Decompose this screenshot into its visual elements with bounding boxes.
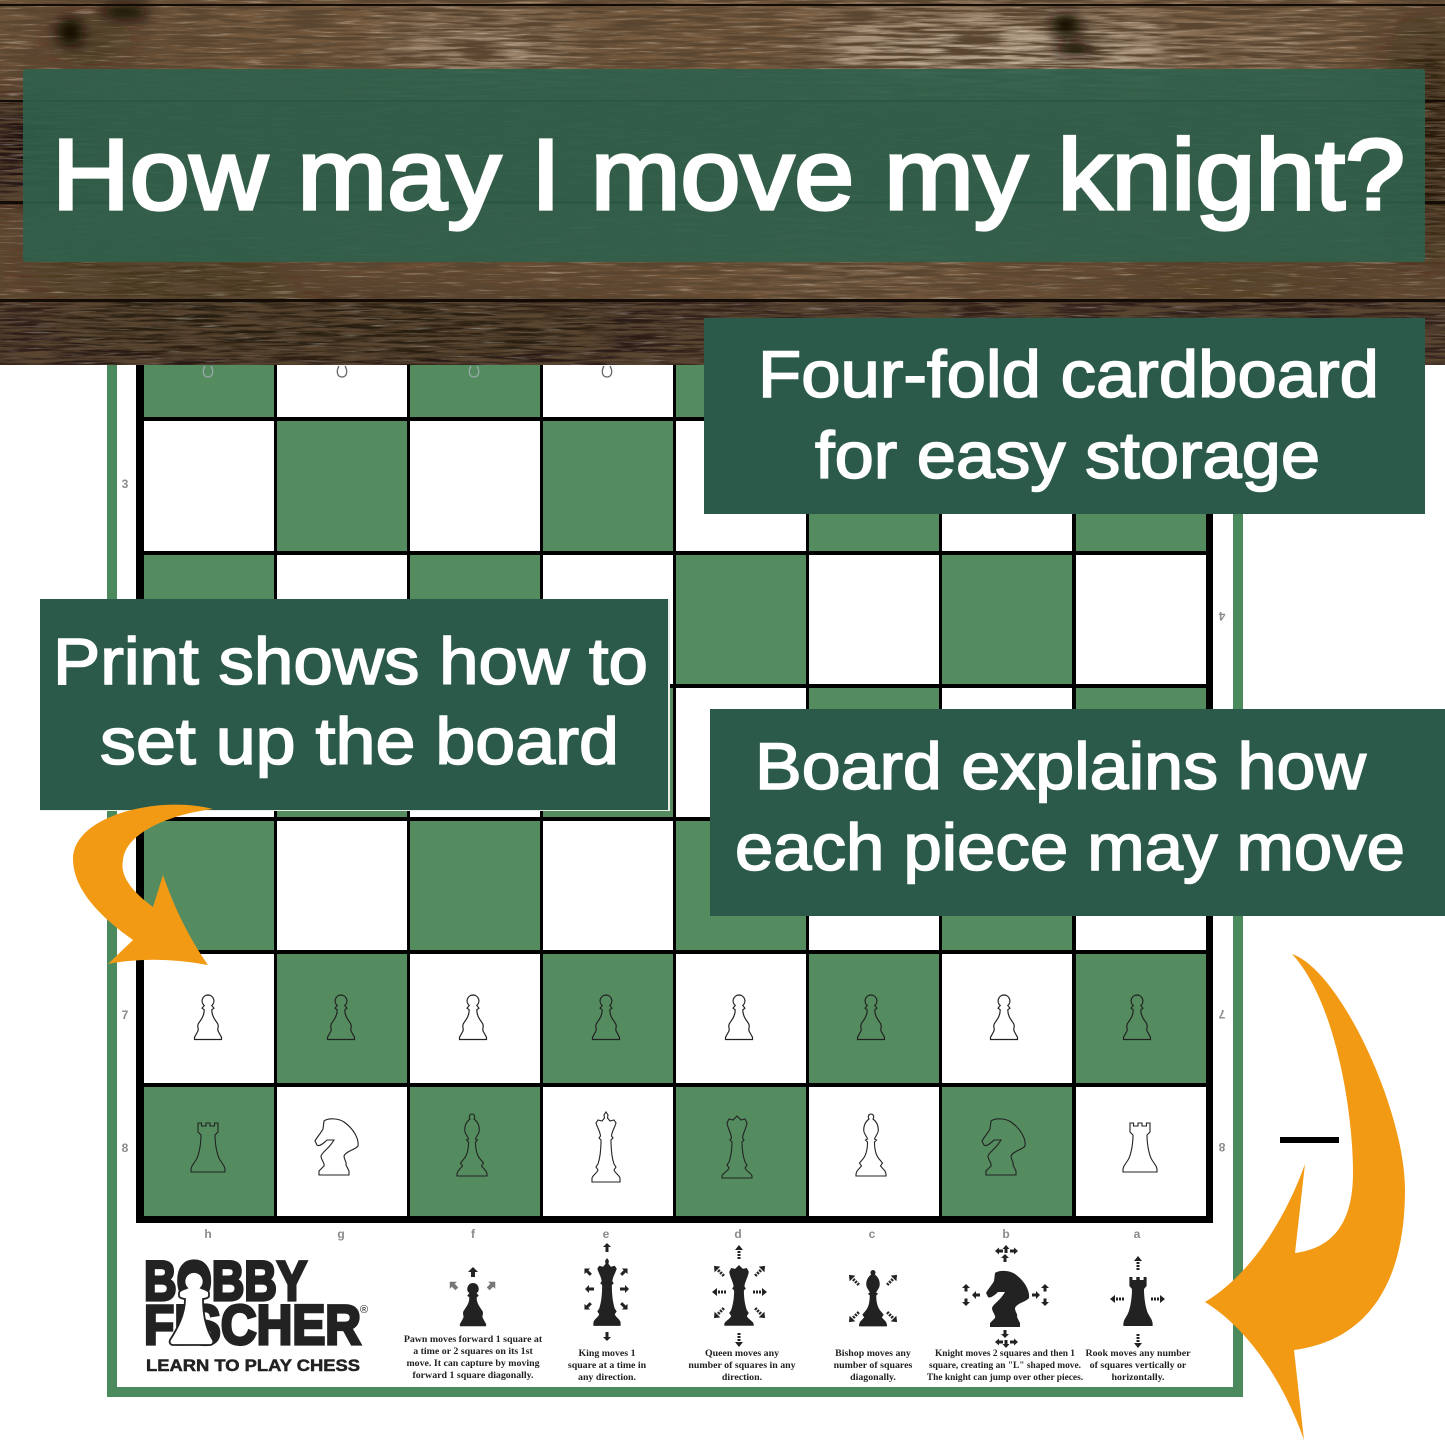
rank labels: 7	[1218, 1007, 1225, 1021]
arrow: to pawn row	[73, 805, 213, 965]
callout: print	[40, 599, 670, 811]
legend: bishop: Bishop moves any	[835, 1348, 911, 1359]
callout: cardboard: for easy storage	[815, 418, 1320, 492]
legend: rook: horizontally.	[1112, 1372, 1165, 1383]
file labels	[204, 1227, 1141, 1241]
wood plank header	[0, 0, 1445, 365]
Bobby Fischer logo	[144, 1249, 368, 1375]
legend: pawn: a time or 2 squares on its 1st	[413, 1346, 533, 1357]
callout: cardboard: Four-fold cardboard	[758, 337, 1379, 411]
callout: board explains: each piece may move	[735, 810, 1405, 884]
title: How may I move my knight?	[52, 119, 1405, 231]
black dash mark	[1280, 1137, 1339, 1143]
file labels: f	[471, 1227, 476, 1241]
callout: print: set up the board	[100, 704, 619, 778]
logo pawn	[170, 1272, 213, 1345]
legend: king: any direction.	[578, 1372, 637, 1383]
Bobby Fischer logo: BOBBY	[144, 1249, 307, 1312]
callout: board explains	[710, 709, 1445, 916]
file labels: g	[337, 1227, 345, 1241]
Bobby Fischer logo: LEARN TO PLAY CHESS	[146, 1357, 360, 1375]
legend: rook	[1085, 1256, 1191, 1383]
legend: bishop: diagonally.	[850, 1372, 896, 1383]
legend: queen	[688, 1245, 796, 1383]
title banner	[23, 69, 1425, 262]
legend: king: King moves 1	[578, 1348, 636, 1359]
file labels: c	[869, 1227, 876, 1241]
legend: pawn: Pawn moves forward 1 square at	[404, 1334, 543, 1345]
wood dark patches	[0, 10, 1445, 360]
legend: bishop: number of squares	[834, 1360, 912, 1371]
pawn heads cut off at top of board	[203, 366, 612, 377]
arrow: to legend	[1205, 954, 1405, 1440]
legend: king: square at a time in	[568, 1360, 647, 1371]
rank labels: 3	[122, 477, 129, 491]
callout: cardboard	[704, 318, 1425, 514]
legend: queen: Queen moves any	[705, 1348, 779, 1359]
Bobby Fischer logo: FISCHER	[144, 1293, 361, 1356]
legend: king	[568, 1243, 647, 1383]
wood knots	[56, 5, 1092, 56]
legend: pawn: move. It can capture by moving	[406, 1358, 540, 1369]
board squares	[144, 340, 1206, 1216]
outlined back row pieces	[191, 1112, 1157, 1182]
file labels: a	[1134, 1227, 1141, 1241]
legend: knight: The knight can jump over other pieces.	[927, 1373, 1083, 1383]
legend: knight	[927, 1245, 1083, 1383]
rank labels: 8	[122, 1141, 129, 1155]
legend: queen: direction.	[722, 1372, 763, 1383]
wood light patches	[380, 12, 1330, 287]
legend: bishop	[834, 1270, 912, 1383]
file labels: h	[204, 1227, 212, 1241]
outlined pawn row	[194, 995, 1150, 1039]
rank labels: 4	[1218, 609, 1225, 623]
file labels: e	[603, 1227, 610, 1241]
Bobby Fischer logo: ®	[360, 1304, 368, 1316]
callout: board explains: Board explains how	[755, 729, 1366, 803]
rank labels: 8	[1218, 1140, 1225, 1154]
legend: rook: of squares vertically or	[1090, 1360, 1187, 1371]
callout: print: Print shows how to	[53, 624, 648, 698]
rank labels: 7	[122, 1008, 129, 1022]
legend: rook: Rook moves any number	[1085, 1348, 1191, 1359]
logo pawn ring	[179, 1261, 209, 1291]
legend: queen: number of squares in any	[688, 1360, 796, 1371]
legend: knight: square, creating an "L" shaped move.	[929, 1361, 1081, 1371]
board green border	[112, 340, 1238, 1392]
legend: pawn: forward 1 square diagonally.	[412, 1370, 534, 1381]
file labels: d	[734, 1227, 742, 1241]
chess board sheet	[112, 340, 1238, 1392]
rank labels	[122, 477, 1225, 1155]
legend: knight: Knight moves 2 squares and then 1	[935, 1349, 1075, 1359]
file labels: b	[1002, 1227, 1010, 1241]
legend: pawn	[404, 1267, 543, 1381]
board black frame	[136, 340, 1213, 1223]
